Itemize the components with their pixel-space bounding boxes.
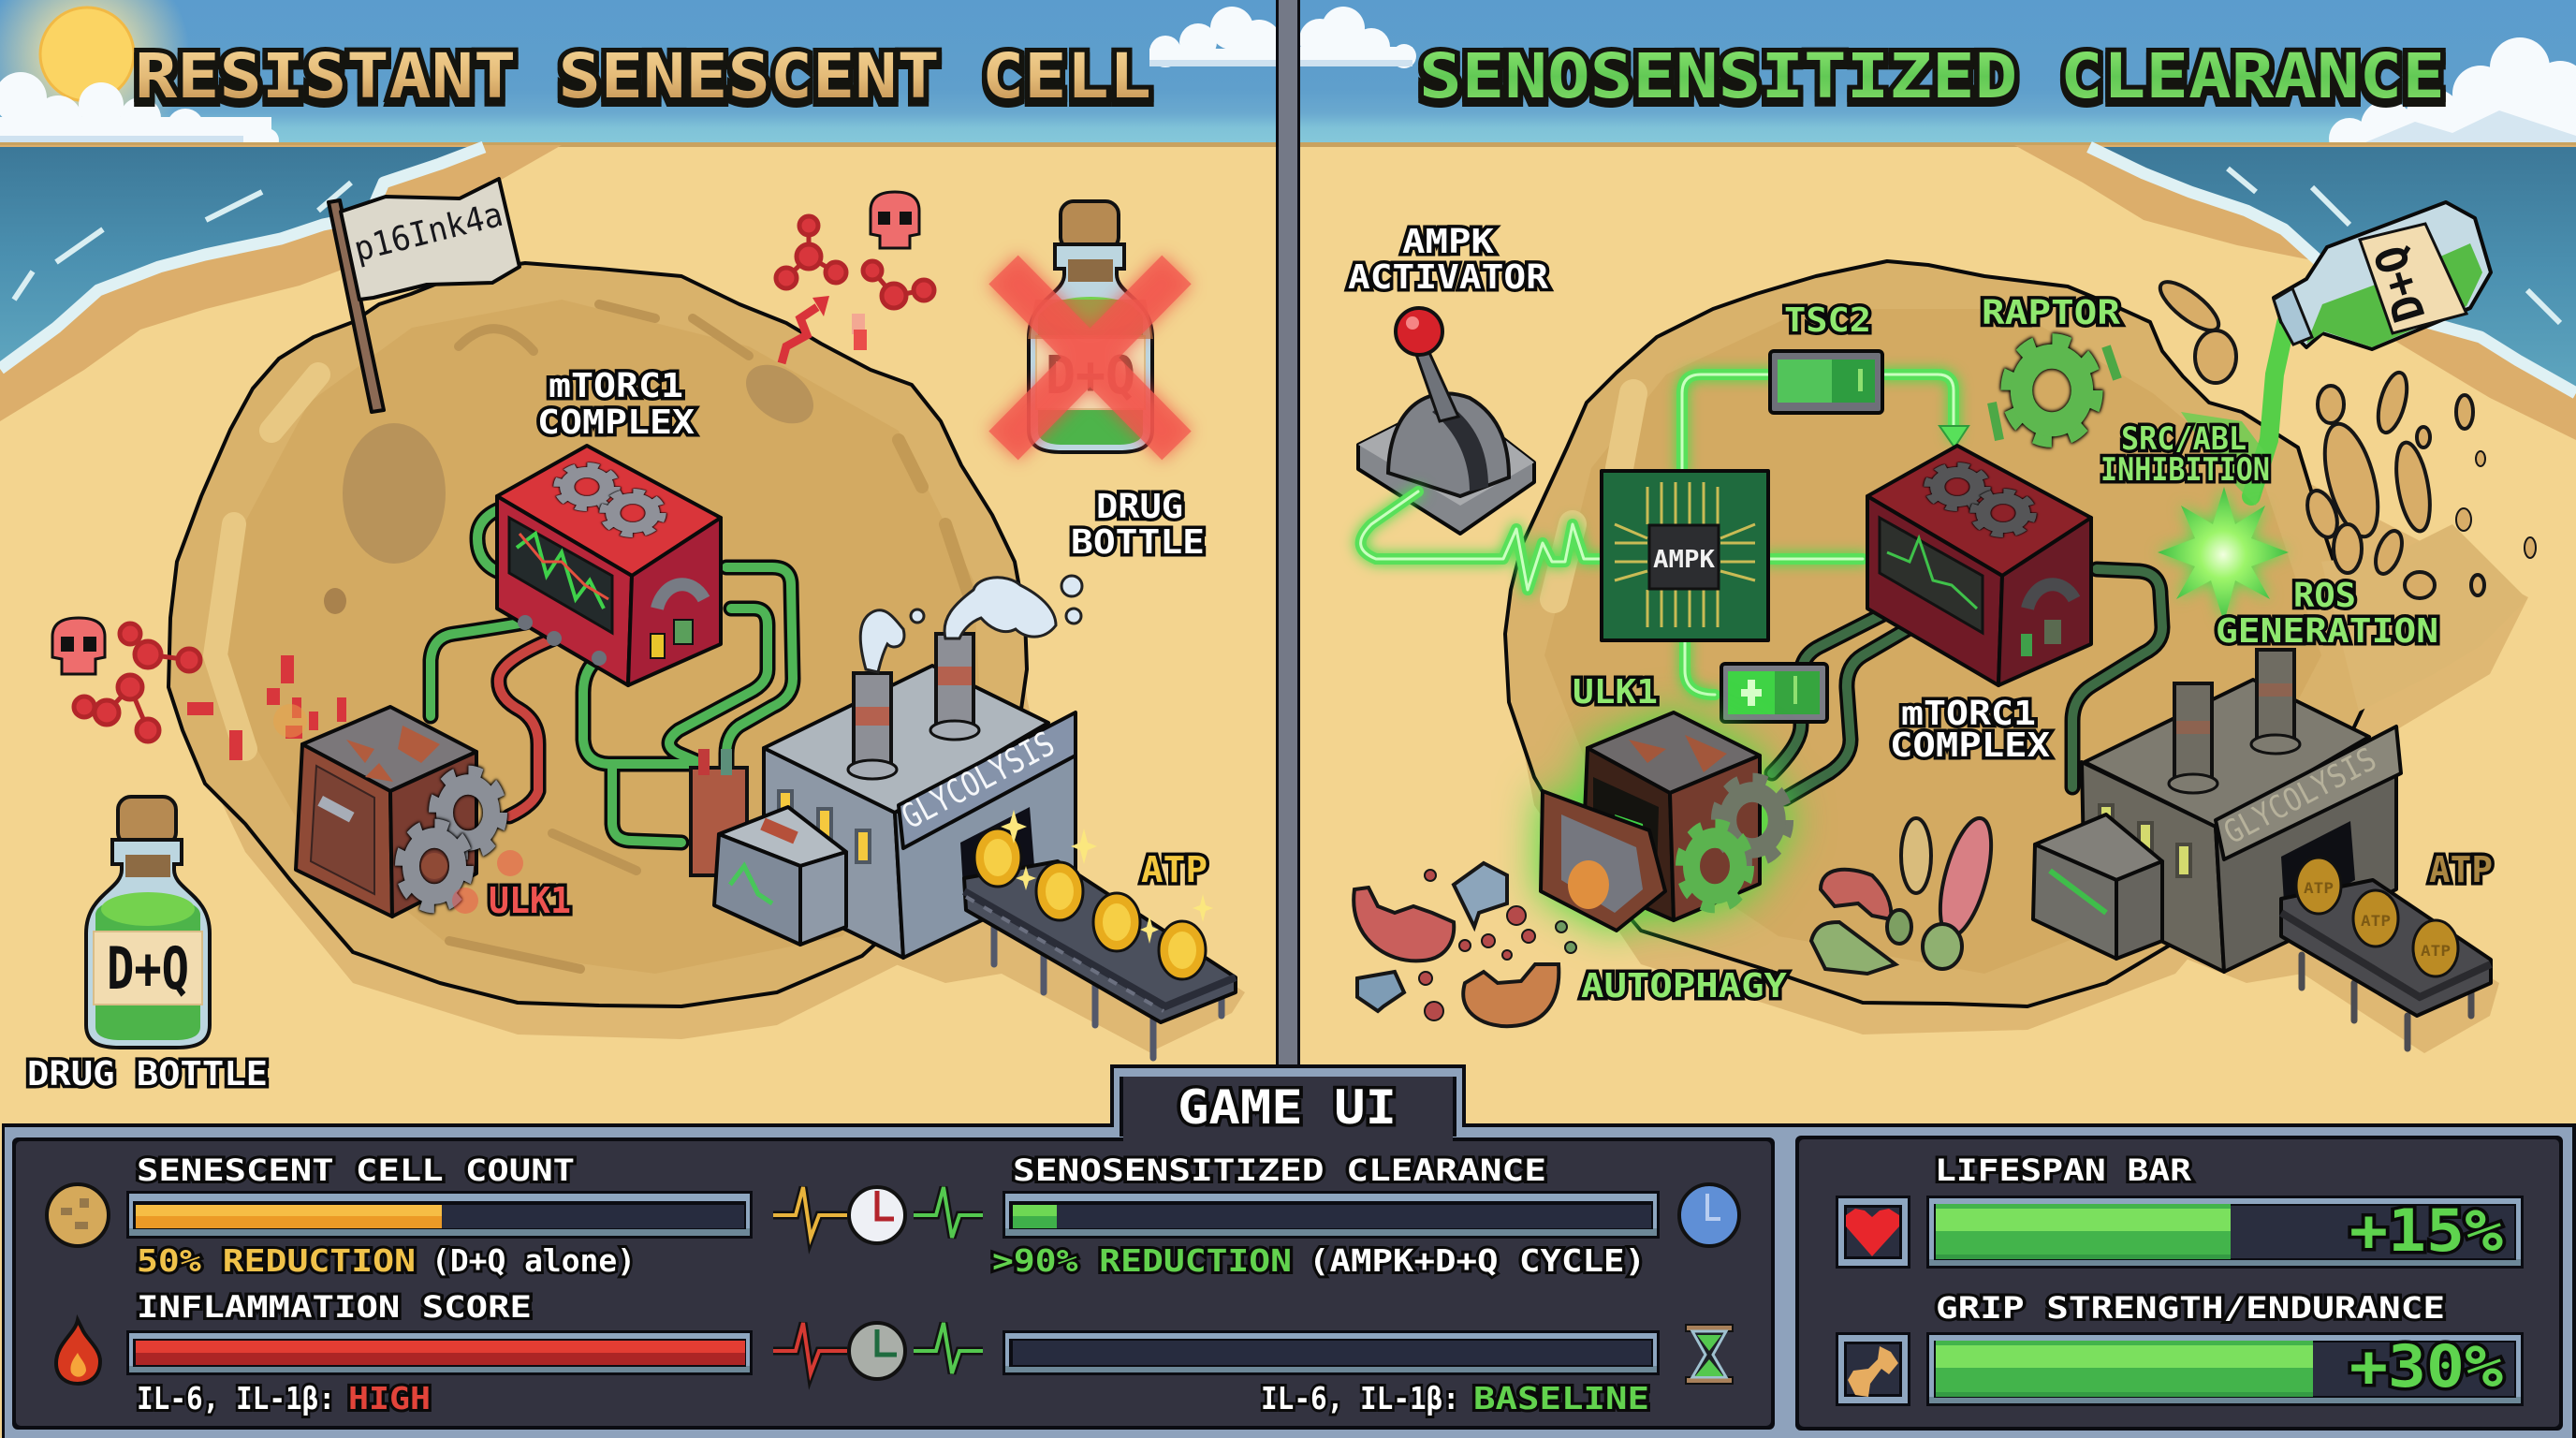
- label: AMPK ACTIVATOR: [1348, 223, 1548, 297]
- factory right: [2033, 680, 2396, 972]
- conveyor right: ATP: [2361, 912, 2391, 930]
- label: SRC/ABL INHIBITION: INHIBITION: [2100, 451, 2270, 489]
- skull left: [52, 618, 105, 674]
- cytokine text: [1261, 1380, 1649, 1416]
- tipped bottle D+Q: D+Q: [2364, 240, 2436, 329]
- pouring green liquid: [2181, 323, 2286, 506]
- value: +15%: +15%: [2349, 1196, 2503, 1265]
- icon: flame: [56, 1320, 100, 1384]
- tab: GAME UI: [1110, 1064, 1466, 1149]
- label: AMPK ACTIVATOR: AMPK: [1402, 223, 1494, 261]
- pipes right: [1772, 569, 2162, 799]
- bar: baseline empty: [1003, 1330, 1660, 1375]
- stat: inflammation score: INFLAMMATION SCORE: [137, 1289, 532, 1325]
- label: ROS GENERATION: ROS: [2293, 577, 2356, 615]
- bar: senescent count: [126, 1191, 753, 1239]
- glowing wire: lever to AMPK: [1361, 492, 1602, 590]
- background: sand: [0, 145, 2576, 1137]
- smoke left: [860, 576, 1082, 672]
- mTORC1 machine left: [497, 446, 721, 685]
- reduction text: 50% REDUCTION: [137, 1242, 416, 1279]
- label: DRUG BOTTLE lower left: DRUG BOTTLE: [27, 1055, 268, 1093]
- conveyor right: ATP: [2421, 942, 2451, 960]
- label: AUTOPHAGY: AUTOPHAGY: [1581, 967, 1787, 1005]
- stat: senescent cell count: [47, 1152, 753, 1279]
- label: TSC2: TSC2: [1784, 301, 1871, 340]
- panel: left stats: [12, 1077, 1775, 1430]
- red arrow: [782, 296, 867, 363]
- label: DRUG BOTTLE right of cell: [1071, 488, 1205, 562]
- red molecules top: [776, 216, 934, 308]
- reduction text: >90% REDUCTION: [992, 1242, 1292, 1279]
- label: ROS GENERATION: GENERATION: [2216, 612, 2438, 651]
- stat: senosensitized clearance: [992, 1152, 1739, 1279]
- GAME UI heading: GAME UI: [1178, 1080, 1397, 1135]
- switch: lower green: [1721, 664, 1827, 722]
- stat: baseline inflammation: [1003, 1325, 1733, 1416]
- icon: heart: [1836, 1196, 1910, 1269]
- crossed bottle: D+Q: [1046, 345, 1135, 406]
- reduction text: (AMPK+D+Q CYCLE): [1309, 1242, 1646, 1279]
- stat: lifespan bar: [1836, 1152, 2524, 1269]
- clouds left: [0, 72, 279, 153]
- label: ULK1 left: [452, 850, 571, 921]
- label: ROS GENERATION: [2216, 577, 2438, 651]
- reduction text: [137, 1242, 636, 1279]
- label: mTORC1 COMPLEX left: [537, 367, 695, 442]
- reduction text: [992, 1242, 1646, 1279]
- stat: grip strength: [1836, 1290, 2524, 1406]
- label: mTORC1 COMPLEX right: COMPLEX: [1890, 726, 2050, 765]
- gear: RAPTOR: [1992, 342, 2117, 440]
- conveyor right: ATP: [2304, 879, 2334, 897]
- skull top: [871, 192, 919, 248]
- timeline top: pulse and clock: [773, 1187, 983, 1243]
- clouds right: [2329, 37, 2576, 164]
- cytokine text: BASELINE: [1473, 1380, 1649, 1416]
- background: sky: [0, 0, 2576, 145]
- cytokine text: IL-6, IL-1β:: [137, 1380, 335, 1416]
- sun: [0, 0, 190, 157]
- icon: bone arm: [1836, 1332, 1910, 1406]
- AMPK chip: AMPK: [1653, 546, 1715, 574]
- label: mTORC1 COMPLEX left: COMPLEX: [537, 404, 695, 442]
- small red engine: [691, 749, 747, 875]
- label: RAPTOR: RAPTOR: [1982, 294, 2120, 332]
- debris: mitochondria outside: [1354, 863, 1576, 1026]
- AMPK chip: [1602, 471, 1768, 640]
- switch: TSC2: [1770, 351, 1882, 413]
- label: AMPK ACTIVATOR: ACTIVATOR: [1348, 258, 1548, 297]
- label: ATP right: ATP: [2429, 849, 2493, 890]
- label: ATP left: ATP: [1141, 849, 1208, 890]
- game UI frame: [2, 1064, 2576, 1438]
- label: SRC/ABL INHIBITION: SRC/ABL: [2121, 420, 2247, 458]
- ULK1 open machine right: [1541, 712, 1788, 931]
- divider between scenes: [1276, 0, 1300, 1072]
- bar: clearance: [1003, 1191, 1660, 1239]
- lever: AMPK activator: [1358, 308, 1534, 534]
- glowing wires: AMPK, TSC2, mTORC1: [1682, 374, 1969, 695]
- label: SRC/ABL INHIBITION: [2100, 420, 2270, 489]
- cytokine text: HIGH: [348, 1380, 431, 1416]
- frame base: [2, 1123, 2576, 1438]
- clouds centre right: [1299, 7, 1416, 68]
- banner: GLYCOLYSIS left: GLYCOLYSIS: [896, 725, 1061, 837]
- label: ULK1 right: ULK1: [1573, 673, 1658, 712]
- SASP red particles: [187, 655, 346, 760]
- red molecules left: [74, 624, 200, 741]
- stat: inflammation score: [56, 1289, 753, 1416]
- banner: GLYCOLYSIS right: GLYCOLYSIS: [2217, 741, 2382, 852]
- bar: inflammation: [126, 1330, 753, 1375]
- icon: hourglass: [1686, 1325, 1733, 1384]
- cytokine text: IL-6, IL-1β:: [1261, 1380, 1459, 1416]
- sparkles: [1001, 810, 1213, 944]
- panel: senosensitized clearance: [1348, 202, 2536, 1053]
- title: resistant senescent cell: RESISTANT SENESCENT CELL: [135, 40, 1151, 112]
- panel: right stats: [1795, 1136, 2563, 1431]
- stat: grip strength: GRIP STRENGTH/ENDURANCE: [1936, 1290, 2445, 1326]
- sea left: [0, 145, 562, 421]
- chimneys left: [848, 634, 979, 779]
- stat: lifespan bar: LIFESPAN BAR: [1935, 1152, 2192, 1188]
- chimneys right: [2169, 650, 2300, 793]
- cell body right: [1505, 261, 2528, 1053]
- bar: lifespan: [1926, 1196, 2524, 1269]
- icon: blue clock coin: [1679, 1184, 1739, 1246]
- burst: ROS: [2158, 487, 2289, 623]
- bar: grip: [1926, 1332, 2524, 1406]
- label: DRUG BOTTLE right of cell: BOTTLE: [1071, 523, 1205, 562]
- ULK1 rusted machine left: [296, 707, 502, 917]
- cell body left: [168, 263, 1245, 1052]
- label: mTORC1 COMPLEX right: [1890, 695, 2050, 765]
- title: senosensitized clearance: SENOSENSITIZED CLEARANCE: [1419, 40, 2445, 112]
- reduction text: (D+Q alone): [432, 1242, 636, 1279]
- dropped bottle: [86, 797, 210, 1048]
- factory left: [691, 666, 1076, 958]
- flag: p16Ink4a: p16Ink4a: [350, 196, 506, 270]
- timeline bottom: pulse and clock: [773, 1323, 983, 1379]
- flag: p16Ink4a: [329, 179, 520, 412]
- debris: organelles inside: [1811, 814, 2001, 974]
- crossed bottle: [1003, 201, 1177, 452]
- clouds centre left: [1149, 7, 1281, 67]
- conveyor right: [2281, 858, 2491, 1049]
- tipped bottle D+Q: [2274, 202, 2491, 349]
- panel: resistant senescent cell: [27, 179, 1245, 1093]
- icon: cell coin: [47, 1184, 109, 1246]
- label: mTORC1 COMPLEX left: mTORC1: [549, 367, 683, 405]
- stat: senescent cell count: SENESCENT CELL COUNT: [137, 1152, 575, 1188]
- value: +30%: +30%: [2349, 1332, 2503, 1401]
- mTORC1 machine right: [1867, 446, 2091, 685]
- D+Q label left bottle: D+Q: [107, 934, 189, 1003]
- crumbled fragments: [2153, 274, 2536, 598]
- stat: senosensitized clearance: SENOSENSITIZED CLEARANCE: [1013, 1152, 1546, 1188]
- conveyor left: [964, 829, 1236, 1058]
- pipes left: [431, 510, 793, 843]
- sea right: [2014, 145, 2576, 440]
- label: mTORC1 COMPLEX right: mTORC1: [1901, 695, 2036, 733]
- label: ULK1 left: ULK1: [489, 880, 571, 921]
- label: DRUG BOTTLE right of cell: DRUG: [1096, 488, 1183, 526]
